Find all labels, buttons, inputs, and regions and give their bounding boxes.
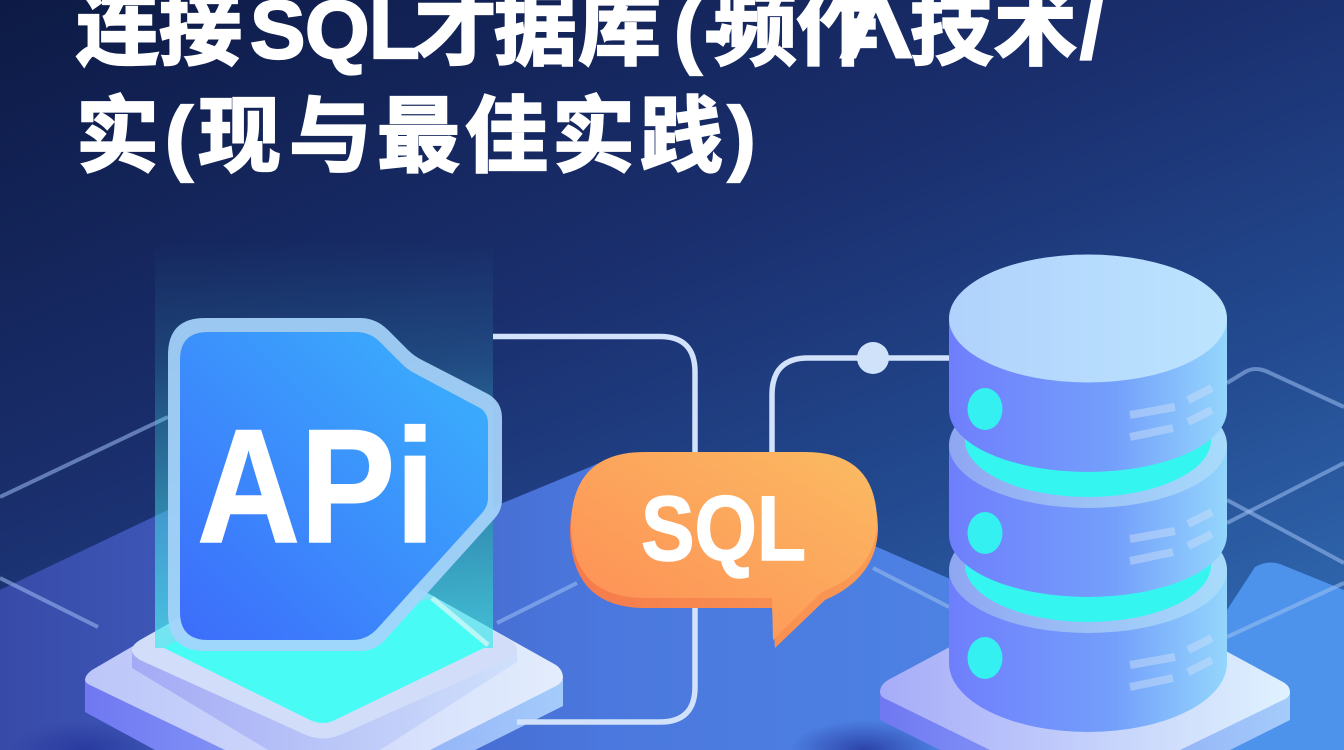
lower cyan band <box>965 508 1211 622</box>
API tag icon <box>168 318 502 651</box>
database cylinder <box>949 254 1227 732</box>
floor shadows <box>790 690 940 750</box>
API label: APi <box>197 396 435 577</box>
middle tier <box>949 445 1227 597</box>
upper ring <box>949 382 1227 508</box>
title <box>76 0 1103 183</box>
top tier <box>949 254 1227 472</box>
floor plane left <box>0 510 168 750</box>
floor plane right <box>440 458 1227 750</box>
connector node <box>857 342 889 374</box>
database connector <box>772 358 950 460</box>
connector lines <box>493 336 950 722</box>
platform glow surface <box>164 598 488 723</box>
upper cyan band <box>965 383 1211 497</box>
database platform <box>880 578 1290 750</box>
SQL label: SQL <box>641 478 806 580</box>
title line 2: 实(现与最佳实践) <box>76 90 756 183</box>
floor panel far right <box>1150 563 1344 750</box>
bottom tier <box>949 570 1227 732</box>
SQL speech bubble <box>570 452 878 648</box>
light beam <box>155 240 493 648</box>
lower ring <box>949 507 1227 633</box>
lower connector <box>517 600 695 722</box>
upper left connector <box>493 336 695 460</box>
API platform <box>85 538 563 750</box>
